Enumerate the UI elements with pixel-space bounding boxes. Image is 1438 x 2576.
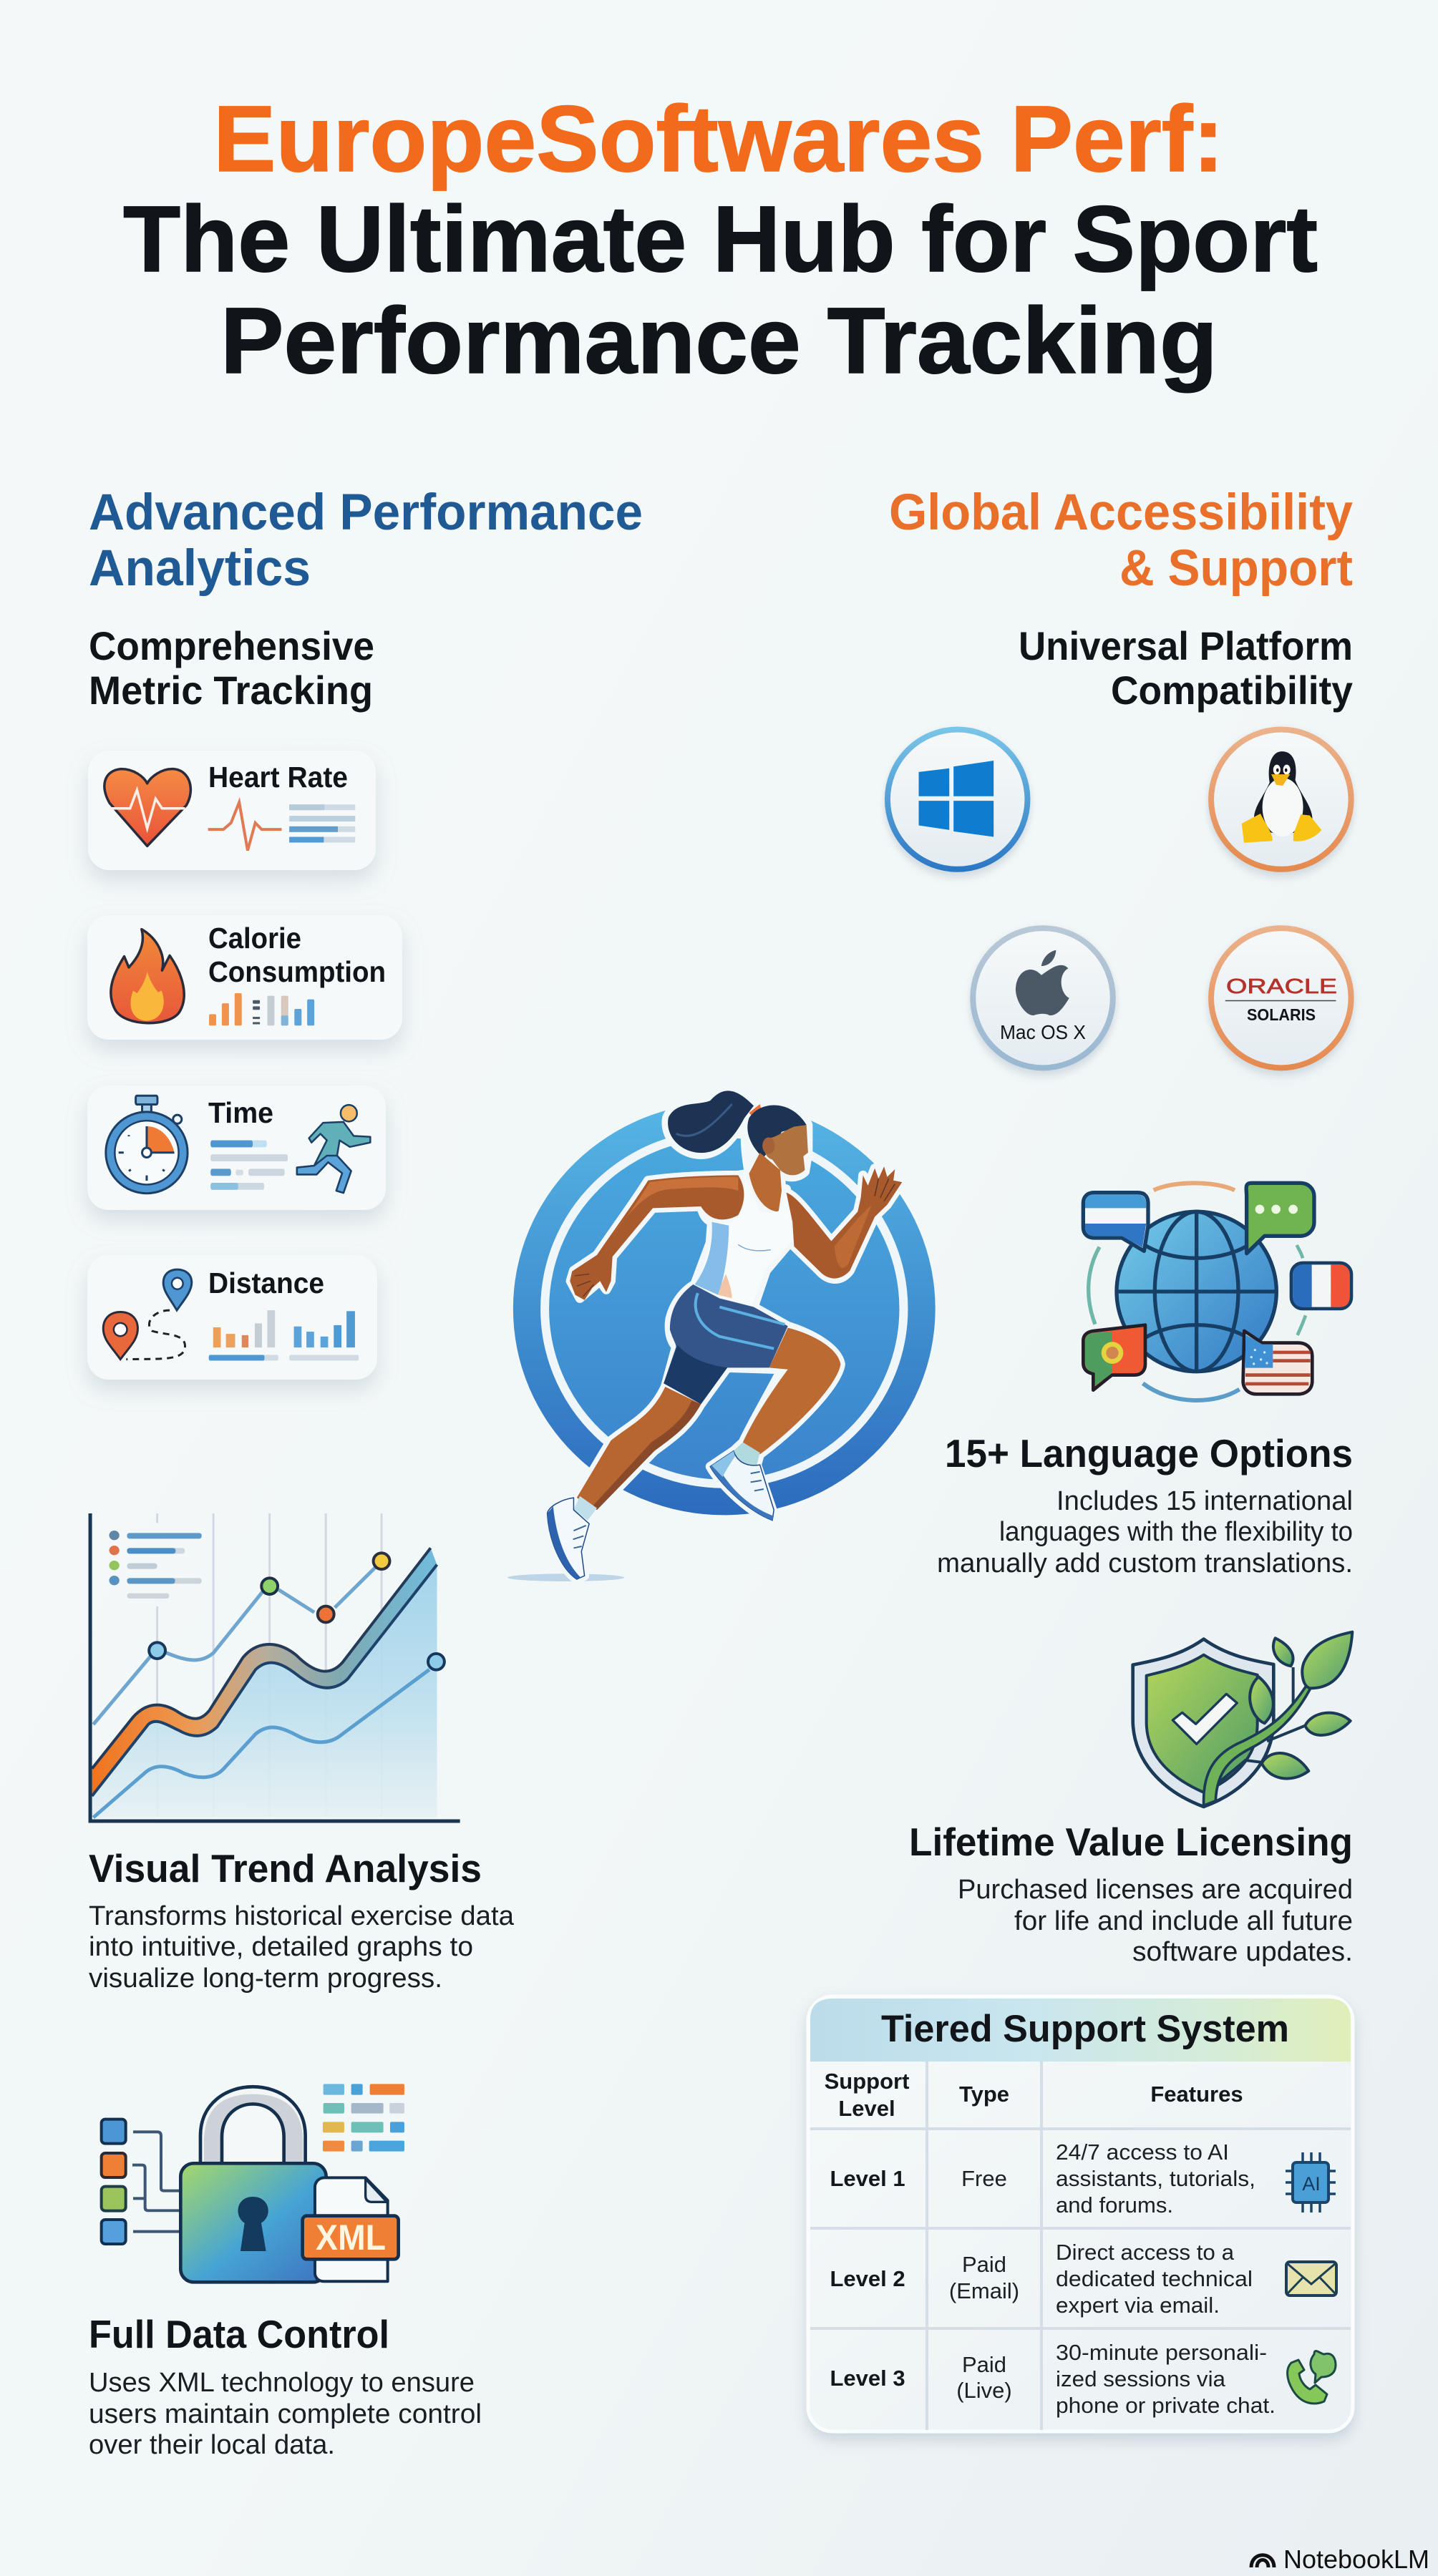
label: xml badge text: XML	[316, 2218, 386, 2258]
panel: advanced performance analytics heading: Advanced Performance	[89, 484, 643, 541]
row: level 2: (Email)	[949, 2278, 1019, 2303]
row: level 3: Level 3	[830, 2366, 905, 2391]
heading: comprehensive metric tracking: Comprehensive	[89, 623, 374, 668]
row: level 2: dedicated technical	[1056, 2266, 1253, 2291]
arm front	[787, 1166, 902, 1279]
row: level 3: 30-minute personali-	[1056, 2340, 1267, 2365]
table title: Tiered Support System	[881, 2008, 1289, 2050]
row: level 3: (Live)	[956, 2378, 1012, 2403]
card: calorie consumption: Calorie	[208, 922, 301, 955]
card: time	[87, 1085, 386, 1210]
text block: full data control: users maintain complete control	[89, 2399, 482, 2429]
row: level 3: ized sessions via	[1056, 2366, 1226, 2391]
icon: heart	[105, 769, 355, 850]
row: level 2: Paid	[962, 2252, 1006, 2277]
text block: 15+ language options: 15+ Language Options	[945, 1431, 1353, 1475]
text block: full data control	[89, 2312, 482, 2460]
card: time: Time	[208, 1096, 273, 1129]
text block: full data control: Uses XML technology to ensure	[89, 2368, 475, 2398]
panel: advanced performance analytics heading	[89, 484, 643, 597]
title: EuropeSoftwares Perf:	[213, 86, 1224, 191]
icon: phone and chat	[1288, 2351, 1336, 2404]
panel: platform icons	[888, 730, 1351, 1068]
card: calorie consumption: Consumption	[208, 955, 386, 988]
header row: Type	[959, 2082, 1009, 2107]
panel: global accessibility heading	[889, 484, 1353, 597]
label: oracle: ORACLE	[1226, 975, 1337, 998]
text block: full data control: over their local data.	[89, 2430, 335, 2460]
text block: visual trend analysis: Visual Trend Analysis	[89, 1846, 482, 1890]
heading: universal platform compatibility	[1019, 623, 1353, 713]
row: level 1: and forums.	[1056, 2192, 1173, 2218]
text block: visual trend analysis	[89, 1846, 515, 1994]
row: level 1: assistants, tutorials,	[1056, 2166, 1255, 2191]
row: level 1: 24/7 access to AI	[1056, 2140, 1229, 2165]
text block: lifetime value licensing: Lifetime Value Licensing	[909, 1820, 1353, 1864]
icon: flame	[111, 930, 314, 1025]
icon: envelope	[1286, 2262, 1336, 2296]
row: level 2	[830, 2240, 1253, 2318]
panel: global accessibility heading: Global Accessibility	[889, 484, 1353, 541]
text block: lifetime value licensing: for life and include all future	[1014, 1906, 1353, 1936]
row: level 2: Level 2	[830, 2266, 905, 2291]
label: mac os x: Mac OS X	[1000, 1021, 1086, 1043]
text block: visual trend analysis: into intuitive, detailed graphs to	[89, 1932, 473, 1962]
icon: oracle solaris	[1211, 928, 1351, 1068]
table: tiered support system	[808, 1996, 1353, 2431]
heading: universal platform compatibility: Universal Platform	[1019, 623, 1353, 668]
row: level 2: expert via email.	[1056, 2293, 1220, 2318]
text block: visual trend analysis: visualize long-term progress.	[89, 1963, 442, 1994]
card: distance	[87, 1255, 377, 1380]
icon: padlock with xml file	[102, 2084, 404, 2282]
card: heart rate	[88, 751, 376, 870]
watermark: notebooklm: NotebookLM	[1283, 2545, 1429, 2574]
text block: 15+ language options	[937, 1431, 1353, 1579]
text block: lifetime value licensing	[909, 1820, 1353, 1967]
icon: windows	[888, 730, 1027, 869]
hair	[668, 1091, 754, 1153]
heading: comprehensive metric tracking: Metric Tracking	[89, 668, 373, 713]
card: distance: Distance	[208, 1267, 324, 1299]
row: level 1: Free	[961, 2166, 1007, 2191]
chart: visual trend analysis	[90, 1513, 460, 1821]
panel: advanced performance analytics heading: Analytics	[89, 540, 311, 597]
text block: lifetime value licensing: Purchased licenses are acquired	[958, 1875, 1353, 1905]
card: calorie consumption	[87, 915, 402, 1040]
icon: linux penguin	[1211, 730, 1351, 869]
icon: apple mac os x	[973, 928, 1113, 1068]
row: level 3: phone or private chat.	[1056, 2393, 1276, 2418]
title: Performance Tracking	[220, 288, 1218, 393]
top	[698, 1174, 792, 1305]
row: level 1: Level 1	[830, 2166, 905, 2191]
illustration: runner	[507, 1088, 936, 1581]
row: level 2: Direct access to a	[1056, 2240, 1235, 2265]
icon: running figure	[297, 1105, 370, 1193]
header row	[825, 2069, 1243, 2121]
legend	[109, 1531, 202, 1599]
row: level 3: Paid	[962, 2352, 1006, 2377]
icon: stopwatch	[106, 1096, 288, 1194]
icon: map pins	[103, 1269, 359, 1360]
text block: visual trend analysis: Transforms historical exercise data	[89, 1901, 515, 1931]
header row: Support	[825, 2069, 909, 2094]
heading: comprehensive metric tracking	[89, 623, 374, 713]
heading: universal platform compatibility: Compatibility	[1111, 668, 1353, 713]
text block: 15+ language options: Includes 15 international	[1056, 1486, 1353, 1516]
icon: ai chip	[1286, 2152, 1336, 2212]
icon: globe with language bubbles	[1083, 1183, 1351, 1400]
row: level 1	[830, 2140, 1255, 2218]
shoes	[573, 1496, 597, 1521]
label: solaris: SOLARIS	[1247, 1005, 1316, 1024]
runner halo	[548, 1088, 902, 1579]
header row: Features	[1150, 2082, 1243, 2107]
legs	[577, 1387, 701, 1510]
shorts	[664, 1284, 788, 1404]
icon: ai chip: AI	[1302, 2173, 1321, 2195]
panel: global accessibility heading: & Support	[1119, 540, 1353, 597]
text block: 15+ language options: manually add custom translations.	[937, 1548, 1353, 1579]
icon: shield with leaves	[1133, 1632, 1352, 1807]
text block: 15+ language options: languages with the flexibility to	[999, 1517, 1353, 1547]
arm back	[570, 1175, 744, 1300]
title: The Ultimate Hub for Sport	[123, 186, 1318, 291]
skin: neck and face	[749, 1153, 782, 1211]
row: level 3	[830, 2340, 1276, 2418]
title	[123, 86, 1318, 393]
header row: Level	[838, 2096, 895, 2121]
text block: lifetime value licensing: software updates.	[1132, 1937, 1353, 1967]
card: heart rate: Heart Rate	[208, 761, 348, 794]
text block: full data control: Full Data Control	[89, 2312, 389, 2356]
